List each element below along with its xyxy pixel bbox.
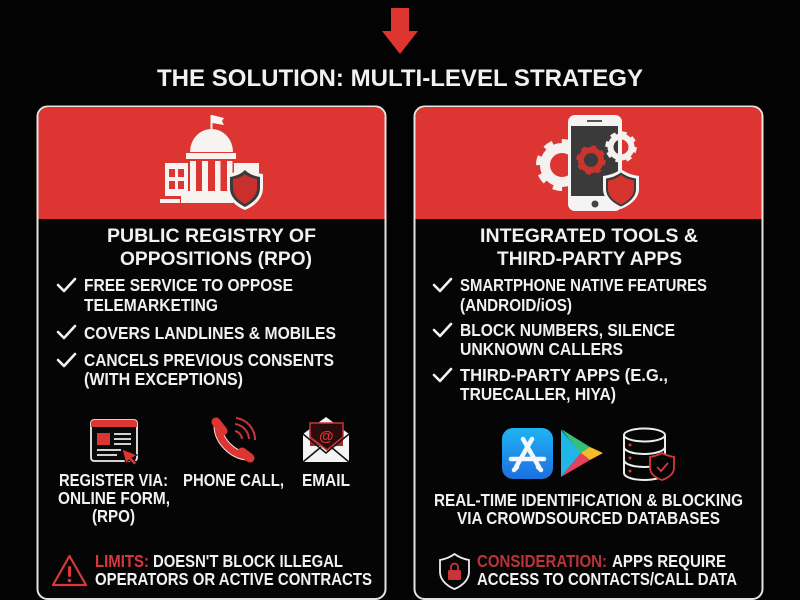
description: [434, 490, 743, 528]
icon: email: @: [319, 428, 334, 445]
panel header band: [38, 107, 384, 219]
icon: shield with lock: [440, 554, 469, 589]
bullet list: COVERS LANDLINES & MOBILES: [84, 323, 336, 343]
icon: secure database: [624, 428, 674, 480]
bullet list: BLOCK NUMBERS, SILENCE: [460, 320, 675, 340]
limits note: OPERATORS OR ACTIVE CONTRACTS: [95, 569, 372, 589]
consideration note: CONSIDERATION:: [477, 551, 607, 571]
bullet list: TRUECALLER, HIYA): [460, 384, 616, 404]
panel header band: [416, 107, 762, 219]
consideration note: [477, 551, 737, 589]
bullet list: (ANDROID/iOS): [460, 295, 572, 315]
bullet list: (WITH EXCEPTIONS): [84, 369, 243, 389]
registration channels labels: (RPO): [92, 506, 135, 526]
consideration note: ACCESS TO CONTACTS/CALL DATA: [477, 569, 737, 589]
icon: smartphone with gears and shield: [539, 115, 639, 211]
heading: [480, 225, 698, 270]
arrow: down: [382, 8, 418, 54]
registration channels labels: EMAIL: [302, 470, 350, 490]
bullet list: FREE SERVICE TO OPPOSE: [84, 275, 293, 295]
registration channels labels: [58, 470, 350, 526]
bullet list: TELEMARKETING: [84, 295, 218, 315]
heading: INTEGRATED TOOLS &: [480, 225, 698, 247]
registration channels labels: REGISTER VIA:: [59, 470, 168, 490]
icon: app store: [502, 428, 553, 479]
bullet list: THIRD-PARTY APPS (E.G.,: [460, 365, 668, 385]
limits note: [95, 551, 372, 589]
bullet list: [58, 275, 336, 389]
bullet list: SMARTPHONE NATIVE FEATURES: [460, 275, 707, 295]
consideration note: APPS REQUIRE: [612, 551, 726, 571]
icon: online form: [91, 420, 137, 465]
description: REAL-TIME IDENTIFICATION & BLOCKING: [434, 490, 743, 510]
heading: THIRD-PARTY APPS: [497, 248, 682, 270]
bullet list: CANCELS PREVIOUS CONSENTS: [84, 350, 334, 370]
heading: [107, 225, 316, 270]
panel: integrated tools and third-party apps: [414, 106, 762, 599]
icon: play store: [561, 429, 603, 477]
registration channels labels: PHONE CALL,: [183, 470, 284, 490]
icon: government building with shield: [160, 115, 263, 210]
heading: PUBLIC REGISTRY OF: [107, 225, 316, 247]
panel frame: [414, 106, 762, 599]
panel frame: [38, 106, 386, 599]
heading: OPPOSITIONS (RPO): [120, 248, 312, 270]
icon: warning triangle: [53, 556, 86, 585]
registration channels labels: ONLINE FORM,: [58, 488, 170, 508]
panel: public registry of oppositions: [38, 106, 386, 599]
description: VIA CROWDSOURCED DATABASES: [457, 508, 720, 528]
limits note: DOESN'T BLOCK ILLEGAL: [153, 551, 343, 571]
bullet list: [434, 275, 707, 404]
limits note: LIMITS:: [95, 551, 149, 571]
icon: phone call: [216, 418, 255, 458]
icon: email: [303, 417, 349, 462]
bullet list: UNKNOWN CALLERS: [460, 339, 623, 359]
title: THE SOLUTION: MULTI-LEVEL STRATEGY: [157, 65, 643, 92]
